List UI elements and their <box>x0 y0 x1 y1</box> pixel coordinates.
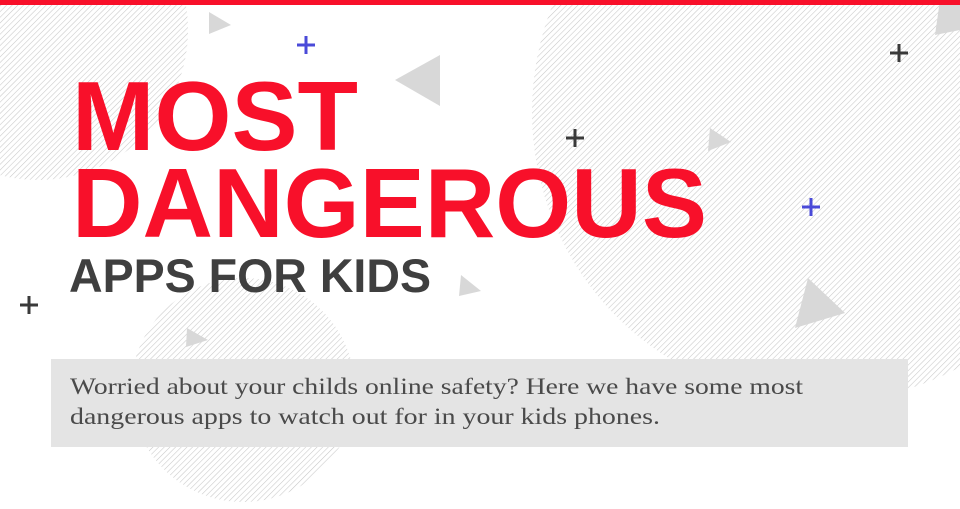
intro text box: Worried about your childs online safety? Here we have some most <box>70 374 804 399</box>
title <box>69 61 707 302</box>
top red bar <box>0 0 960 5</box>
plus signs <box>20 36 908 314</box>
decorative hatched circle: top left <box>0 0 188 180</box>
intro text box <box>51 359 908 447</box>
decorative hatched circle: bottom left <box>131 278 355 502</box>
title: APPS FOR KIDS <box>69 249 431 302</box>
title: DANGEROUS <box>72 148 707 258</box>
intro text box: dangerous apps to watch out for in your kids phones. <box>70 404 660 429</box>
decorative hatched circle: right <box>532 0 960 402</box>
title: MOST <box>72 61 358 171</box>
decorative triangles <box>186 0 960 347</box>
